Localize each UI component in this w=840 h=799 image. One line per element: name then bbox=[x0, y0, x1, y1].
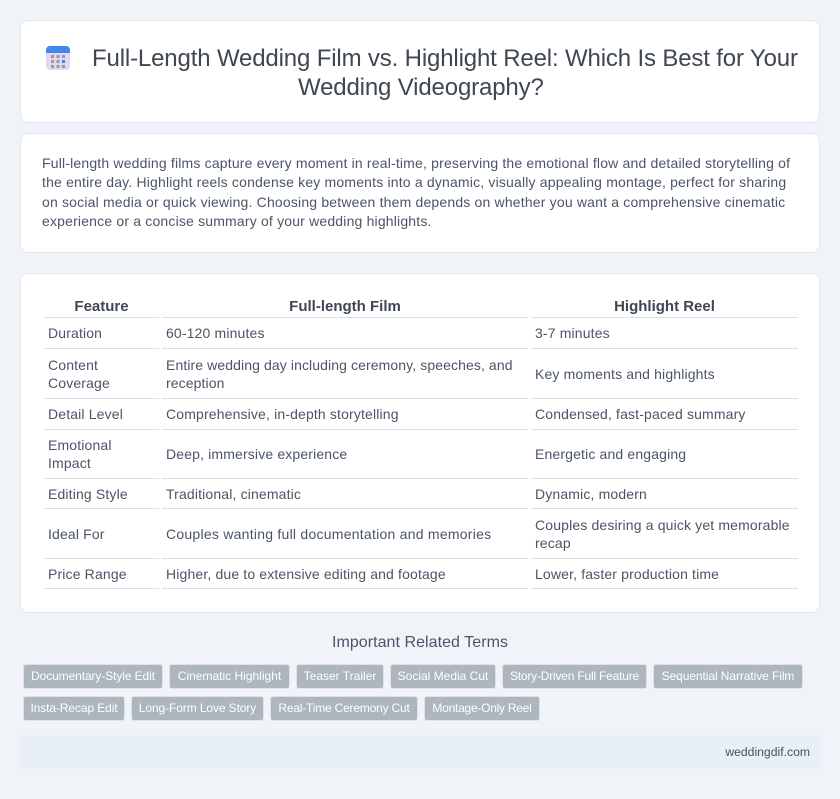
row: editing style bbox=[48, 486, 647, 502]
table header row: Feature bbox=[74, 298, 129, 315]
tag bbox=[390, 664, 496, 689]
row: emotional impact: Deep, immersive experience bbox=[166, 446, 347, 462]
row: duration: 3-7 minutes bbox=[535, 325, 610, 341]
row: ideal for bbox=[48, 517, 790, 551]
intro paragraph: on social media or quick viewing. Choosing between them depends on whether you want a comprehensive cinematic bbox=[42, 194, 785, 210]
tag: Teaser Trailer bbox=[304, 669, 376, 683]
table header row: Highlight Reel bbox=[614, 298, 715, 315]
row: content coverage: Entire wedding day including ceremony, speeches, and bbox=[166, 357, 513, 373]
tag: Sequential Narrative Film bbox=[662, 669, 794, 683]
row: ideal for: Couples desiring a quick yet memorable bbox=[535, 517, 790, 533]
row: emotional impact: Energetic and engaging bbox=[535, 446, 686, 462]
row: ideal for: Ideal For bbox=[48, 526, 105, 542]
row: price range: Higher, due to extensive editing and footage bbox=[166, 566, 446, 582]
tag bbox=[23, 696, 125, 721]
row: editing style: Dynamic, modern bbox=[535, 486, 647, 502]
row: emotional impact bbox=[48, 437, 686, 471]
row: editing style: Traditional, cinematic bbox=[166, 486, 301, 502]
title bbox=[92, 45, 798, 101]
row: detail level: Condensed, fast-paced summary bbox=[535, 406, 746, 422]
intro paragraph: experience or a concise summary of your wedding highlights. bbox=[42, 213, 432, 229]
intro paragraph: the entire day. Highlight reels condense key moments into a dynamic, visually appealing montage, perfect for sharing bbox=[42, 174, 786, 190]
tag: Documentary-Style Edit bbox=[31, 669, 155, 683]
tag bbox=[131, 696, 264, 721]
tag bbox=[502, 664, 647, 689]
row: duration bbox=[48, 325, 610, 341]
tag: Social Media Cut bbox=[398, 669, 488, 683]
row: detail level: Comprehensive, in-depth storytelling bbox=[166, 406, 399, 422]
tag: Long-Form Love Story bbox=[139, 701, 256, 715]
tag: Insta-Recap Edit bbox=[30, 701, 118, 715]
intro text panel bbox=[20, 133, 820, 253]
row: duration: 60-120 minutes bbox=[166, 325, 265, 341]
table header row bbox=[74, 298, 715, 315]
tag: Montage-Only Reel bbox=[432, 701, 532, 715]
tag bbox=[23, 664, 163, 689]
tag bbox=[653, 664, 803, 689]
comparison table bbox=[44, 298, 798, 589]
intro paragraph bbox=[42, 155, 790, 229]
row: duration: Duration bbox=[48, 325, 102, 341]
tag bbox=[296, 664, 384, 689]
row: emotional impact: Impact bbox=[48, 455, 91, 471]
row: detail level bbox=[48, 406, 746, 422]
title: Wedding Videography? bbox=[298, 74, 544, 101]
tag: Real-Time Ceremony Cut bbox=[278, 701, 410, 715]
title: Full-Length Wedding Film vs. Highlight Reel: Which Is Best for Your bbox=[92, 45, 798, 72]
table header row: Full-length Film bbox=[289, 298, 401, 315]
header panel bbox=[20, 20, 820, 123]
tag: Story-Driven Full Feature bbox=[510, 669, 639, 683]
row: price range: Lower, faster production time bbox=[535, 566, 719, 582]
intro paragraph: Full-length wedding films capture every moment in real-time, preserving the emotional flow and detailed storytelling of bbox=[42, 155, 790, 171]
footer source: weddingdif.com bbox=[725, 745, 810, 759]
row: editing style: Editing Style bbox=[48, 486, 128, 502]
row: detail level: Detail Level bbox=[48, 406, 123, 422]
related terms heading: Important Related Terms bbox=[332, 634, 508, 651]
row: ideal for: recap bbox=[535, 535, 571, 551]
row: content coverage bbox=[48, 357, 715, 391]
tag bbox=[424, 696, 540, 721]
row: price range: Price Range bbox=[48, 566, 127, 582]
tag bbox=[270, 696, 418, 721]
row: content coverage: Coverage bbox=[48, 375, 110, 391]
row: content coverage: Key moments and highlights bbox=[535, 366, 715, 382]
tag: Cinematic Highlight bbox=[178, 669, 281, 683]
icon: calendar bbox=[46, 46, 70, 70]
row: content coverage: reception bbox=[166, 375, 224, 391]
row: content coverage: Content bbox=[48, 357, 98, 373]
comparison table panel bbox=[20, 273, 820, 613]
row: price range bbox=[48, 566, 719, 582]
tag bbox=[169, 664, 290, 689]
footer bar bbox=[20, 735, 820, 769]
row: ideal for: Couples wanting full documentation and memories bbox=[166, 526, 491, 542]
row: emotional impact: Emotional bbox=[48, 437, 112, 453]
related terms tags bbox=[23, 664, 803, 721]
